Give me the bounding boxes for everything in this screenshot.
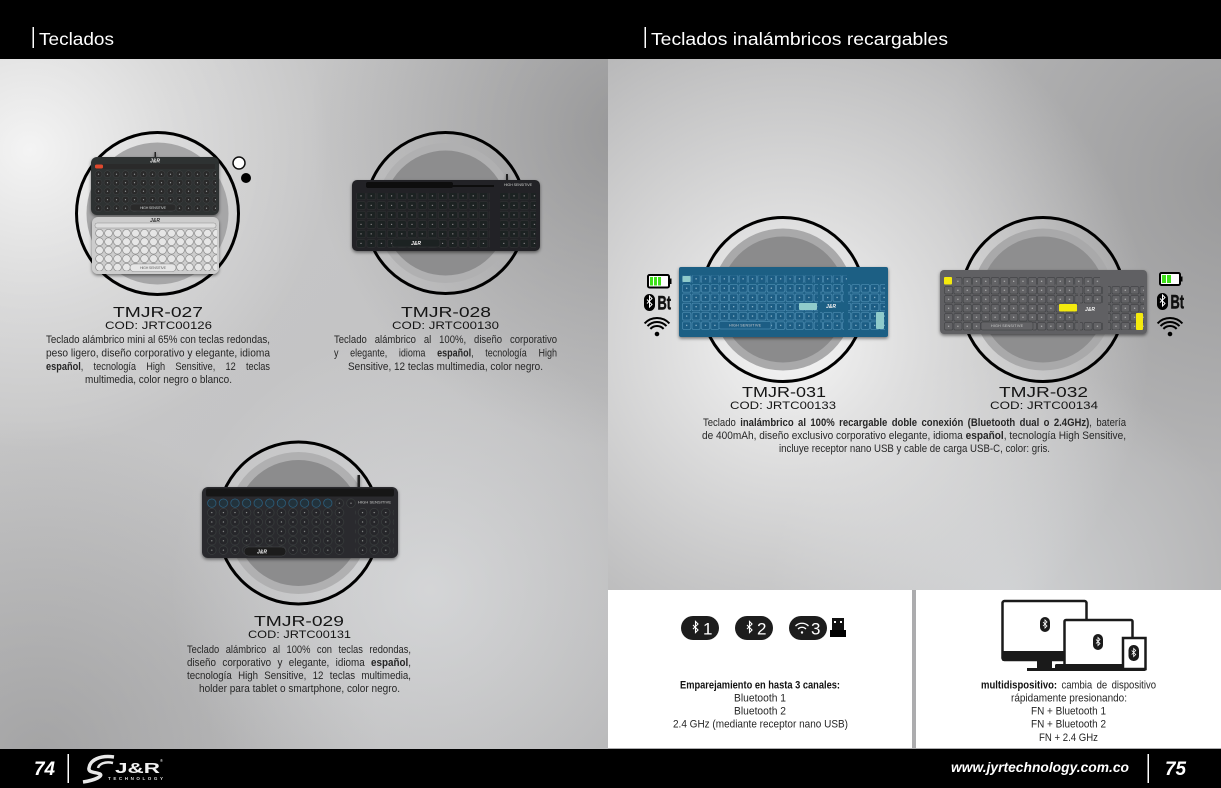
keyboard 031 (679, 267, 888, 337)
badge circle 027 (76, 132, 238, 294)
multi-device text: FN + Bluetooth 2 (1031, 718, 1106, 730)
header: left: Teclados (39, 29, 114, 49)
colour swatches 027 (233, 157, 251, 183)
keyboard 028: J&R (411, 241, 421, 247)
icon: usb receiver (830, 618, 846, 637)
badge circle 032 (961, 218, 1125, 382)
product: TMJR-029 (187, 442, 411, 695)
description 029: tecnología High Sensitive, 12 teclas multimedia, (187, 670, 411, 682)
white keyboard 027 (92, 217, 219, 274)
header: right: Teclados inalámbricos recargables (651, 29, 948, 49)
wifi icon 031 (645, 318, 669, 335)
multi-device text (981, 680, 1156, 744)
channel pill 1: 1 (703, 620, 712, 638)
description 029 (187, 644, 411, 695)
channel pill 3: 3 (811, 620, 820, 638)
white keyboard 027: J&R (150, 218, 160, 224)
description 027: peso ligero, diseño corporativo y elegante, idioma (46, 348, 270, 360)
description 031/032 (702, 417, 1126, 455)
name 028: TMJR-028 (401, 305, 491, 321)
keyboard 028 (352, 174, 540, 251)
footer: left page number (34, 754, 69, 783)
description 027 (46, 334, 271, 386)
badge circle 029 (218, 442, 380, 604)
footer: website and right page number: 75 (1165, 759, 1186, 780)
keyboard 031: HIGH SENSITIVE (729, 324, 762, 328)
pairing text (673, 680, 848, 730)
multi-device text: FN + Bluetooth 1 (1031, 706, 1106, 718)
description 028: y elegante, idioma español, tecnología High (334, 348, 557, 360)
pairing text: Emparejamiento en hasta 3 canales: (680, 680, 840, 692)
description 028 (334, 334, 557, 373)
bluetooth icon 031: Bt (658, 294, 671, 314)
keyboard 029 (202, 475, 398, 558)
description 027: Teclado alámbrico mini al 65% con teclas redondas, (46, 334, 270, 346)
channel pill 2 (735, 616, 773, 640)
code 028: COD: JRTC00130 (392, 320, 499, 332)
footer: website and right page number: www.jyrtechnology.com.co (951, 759, 1129, 775)
status icons 032 (1157, 273, 1184, 335)
status icons 031 (644, 275, 672, 335)
product: TMJR-027 (46, 132, 271, 386)
panel: pairing channels (608, 590, 912, 748)
icon: laptop (1055, 620, 1146, 671)
logo: J&R technology: ® (160, 758, 163, 763)
logo: J&R technology: TECHNOLOGY (108, 776, 163, 781)
channel pill 3 (789, 616, 827, 640)
description 029: Teclado alámbrico al 100% con teclas redondas, (187, 644, 411, 656)
keyboard 031: J&R (826, 304, 836, 310)
badge circle 028 (365, 132, 526, 294)
keyboard 032 (940, 270, 1147, 334)
code 031: COD: JRTC00133 (730, 400, 836, 412)
description 027: español, tecnología High Sensitive, 12 teclas (46, 361, 271, 373)
logo: J&R technology (83, 757, 163, 782)
black keyboard 027: HIGH SENSITIVE (140, 206, 167, 210)
product: TMJR-032 (940, 218, 1184, 412)
product: TMJR-031 (644, 218, 888, 412)
code 032: COD: JRTC00134 (990, 400, 1098, 412)
code 027: COD: JRTC00126 (105, 320, 212, 332)
description 031/032: de 400mAh, diseño exclusivo corporativo elegante, idioma español, tecnología High Sensitive, (702, 430, 1126, 442)
code 029: COD: JRTC00131 (248, 629, 351, 641)
panel: multi-device (916, 590, 1221, 748)
icon: monitor (1002, 601, 1087, 671)
multi-device text: rápidamente presionando: (1011, 692, 1127, 704)
multi-device text: multidispositivo: cambia de dispositivo (981, 680, 1156, 692)
badge circle 031 (701, 218, 865, 382)
keyboard 032: HIGH SENSITIVE (991, 324, 1024, 328)
keyboard 028: HIGH SENSITIVE (504, 183, 533, 187)
name 029: TMJR-029 (254, 614, 344, 630)
description 031/032: Teclado inalámbrico al 100% recargable doble conexión (Bluetooth dual o 2.4GHz), batería (703, 417, 1126, 429)
description 031/032: incluye receptor nano USB y cable de carga USB-C, color: gris. (779, 443, 1050, 455)
channel pill 2: 2 (757, 620, 766, 638)
name 031: TMJR-031 (742, 385, 826, 401)
description 029: holder para tablet o smartphone, color negro. (199, 683, 400, 695)
logo: J&R technology: J&R (115, 760, 160, 777)
keyboard 029: HIGH SENSITIVE (358, 500, 391, 504)
name 032: TMJR-032 (999, 385, 1088, 401)
icon: tablet (1123, 638, 1146, 669)
product: TMJR-028 (334, 132, 557, 373)
battery icon 031 (648, 275, 672, 288)
black keyboard 027: J&R (150, 158, 160, 164)
footer: website and right page number (951, 754, 1186, 783)
description 028: Teclado alámbrico al 100%, diseño corporativo (334, 334, 557, 346)
keyboard 032: J&R (1085, 307, 1095, 313)
footer: left page number: 74 (34, 759, 55, 780)
pairing text: 2.4 GHz (mediante receptor nano USB) (673, 718, 848, 730)
battery icon 032 (1160, 273, 1182, 285)
pairing text: Bluetooth 1 (734, 692, 786, 704)
pairing text: Bluetooth 2 (734, 706, 786, 718)
name 027: TMJR-027 (113, 305, 203, 321)
description 028: Sensitive, 12 teclas multimedia, color negro. (348, 361, 543, 373)
keyboard 029: J&R (257, 550, 267, 556)
description 027: multimedia, color negro o blanco. (85, 374, 232, 386)
bluetooth icon 032: Bt (1170, 292, 1184, 314)
channel pill 1 (681, 616, 719, 640)
wifi icon 032 (1158, 318, 1182, 335)
white keyboard 027: HIGH SENSITIVE (140, 266, 167, 270)
multi-device text: FN + 2.4 GHz (1039, 732, 1098, 744)
description 029: diseño corporativo y elegante, idioma español, (187, 657, 411, 669)
black keyboard 027 (91, 152, 219, 215)
